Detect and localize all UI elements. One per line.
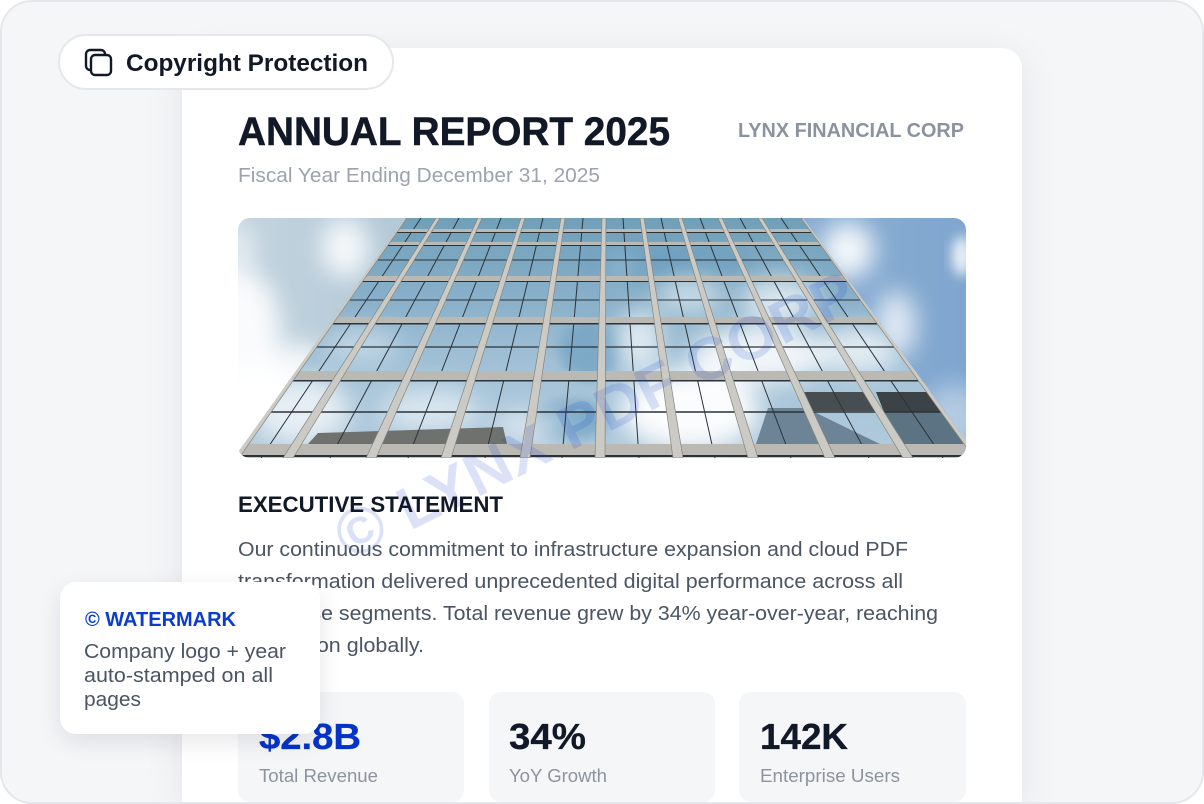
callout description: Company logo + year [84, 641, 286, 663]
callout: watermark [60, 582, 320, 734]
callout description [84, 641, 286, 711]
stat card: total revenue: $2.8B [259, 716, 361, 757]
stat card: year over year growth: 34% [509, 716, 586, 757]
executive statement paragraph [238, 539, 938, 657]
report document contents [238, 116, 966, 802]
badge label: Copyright Protection [126, 50, 368, 77]
stat card: year over year growth [489, 692, 715, 802]
stat card: enterprise users: Enterprise Users [760, 766, 900, 786]
reflections [308, 427, 507, 444]
floor bands [230, 229, 980, 455]
diagonal watermark: LYNX PDF CORP [386, 258, 866, 543]
window divider lines [230, 218, 980, 458]
photo: glass office building against the sky [238, 218, 966, 458]
stat card: year over year growth: YoY Growth [509, 766, 607, 786]
section heading: EXECUTIVE STATEMENT [238, 492, 504, 517]
callout heading: © WATERMARK [85, 609, 237, 631]
vertical mullions [229, 218, 984, 458]
subtitle: Fiscal Year Ending December 31, 2025 [238, 165, 600, 187]
icon: overlapping copies [86, 50, 111, 75]
executive statement paragraph: transformation delivered unprecedented digital performance across all [238, 571, 903, 593]
callout description: auto-stamped on all [84, 665, 273, 687]
stat card: total revenue [238, 692, 464, 802]
badge: copyright protection [58, 34, 394, 90]
executive statement paragraph: $2.8 billion globally. [238, 635, 424, 657]
stat card: total revenue: Total Revenue [259, 766, 378, 786]
title: ANNUAL REPORT 2025 [238, 110, 670, 154]
panel: report document card [182, 48, 1022, 802]
executive statement paragraph: Our continuous commitment to infrastructure expansion and cloud PDF [238, 539, 908, 561]
diagonal watermark: © [322, 486, 398, 574]
stat card: enterprise users [739, 692, 966, 802]
callout description: pages [84, 689, 141, 711]
blue patches in reflection [530, 240, 750, 440]
executive statement paragraph: enterprise segments. Total revenue grew by 34% year-over-year, reaching [238, 603, 938, 625]
company name: LYNX FINANCIAL CORP [738, 120, 964, 142]
stat card: enterprise users: 142K [760, 716, 848, 757]
